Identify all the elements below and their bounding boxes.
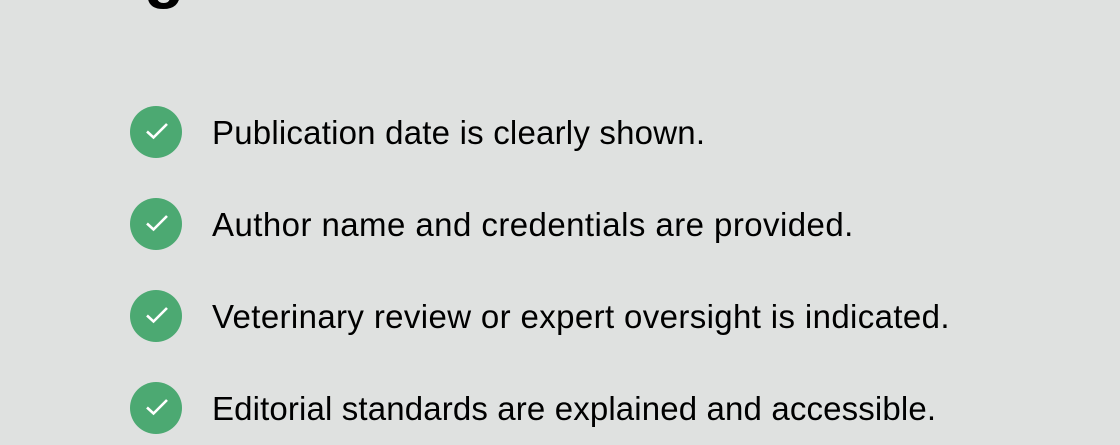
- item: veterinary review: [130, 290, 950, 342]
- item: author name: [130, 198, 854, 250]
- item: veterinary review: Veterinary review or expert oversight is indicated.: [212, 298, 950, 335]
- item: editorial standards: Editorial standards are explained and accessible.: [212, 390, 936, 427]
- item: editorial standards: [130, 382, 936, 434]
- item: author name: Author name and credentials are provided.: [212, 206, 854, 243]
- item: publication date: [130, 106, 705, 158]
- item: publication date: Publication date is clearly shown.: [212, 114, 705, 151]
